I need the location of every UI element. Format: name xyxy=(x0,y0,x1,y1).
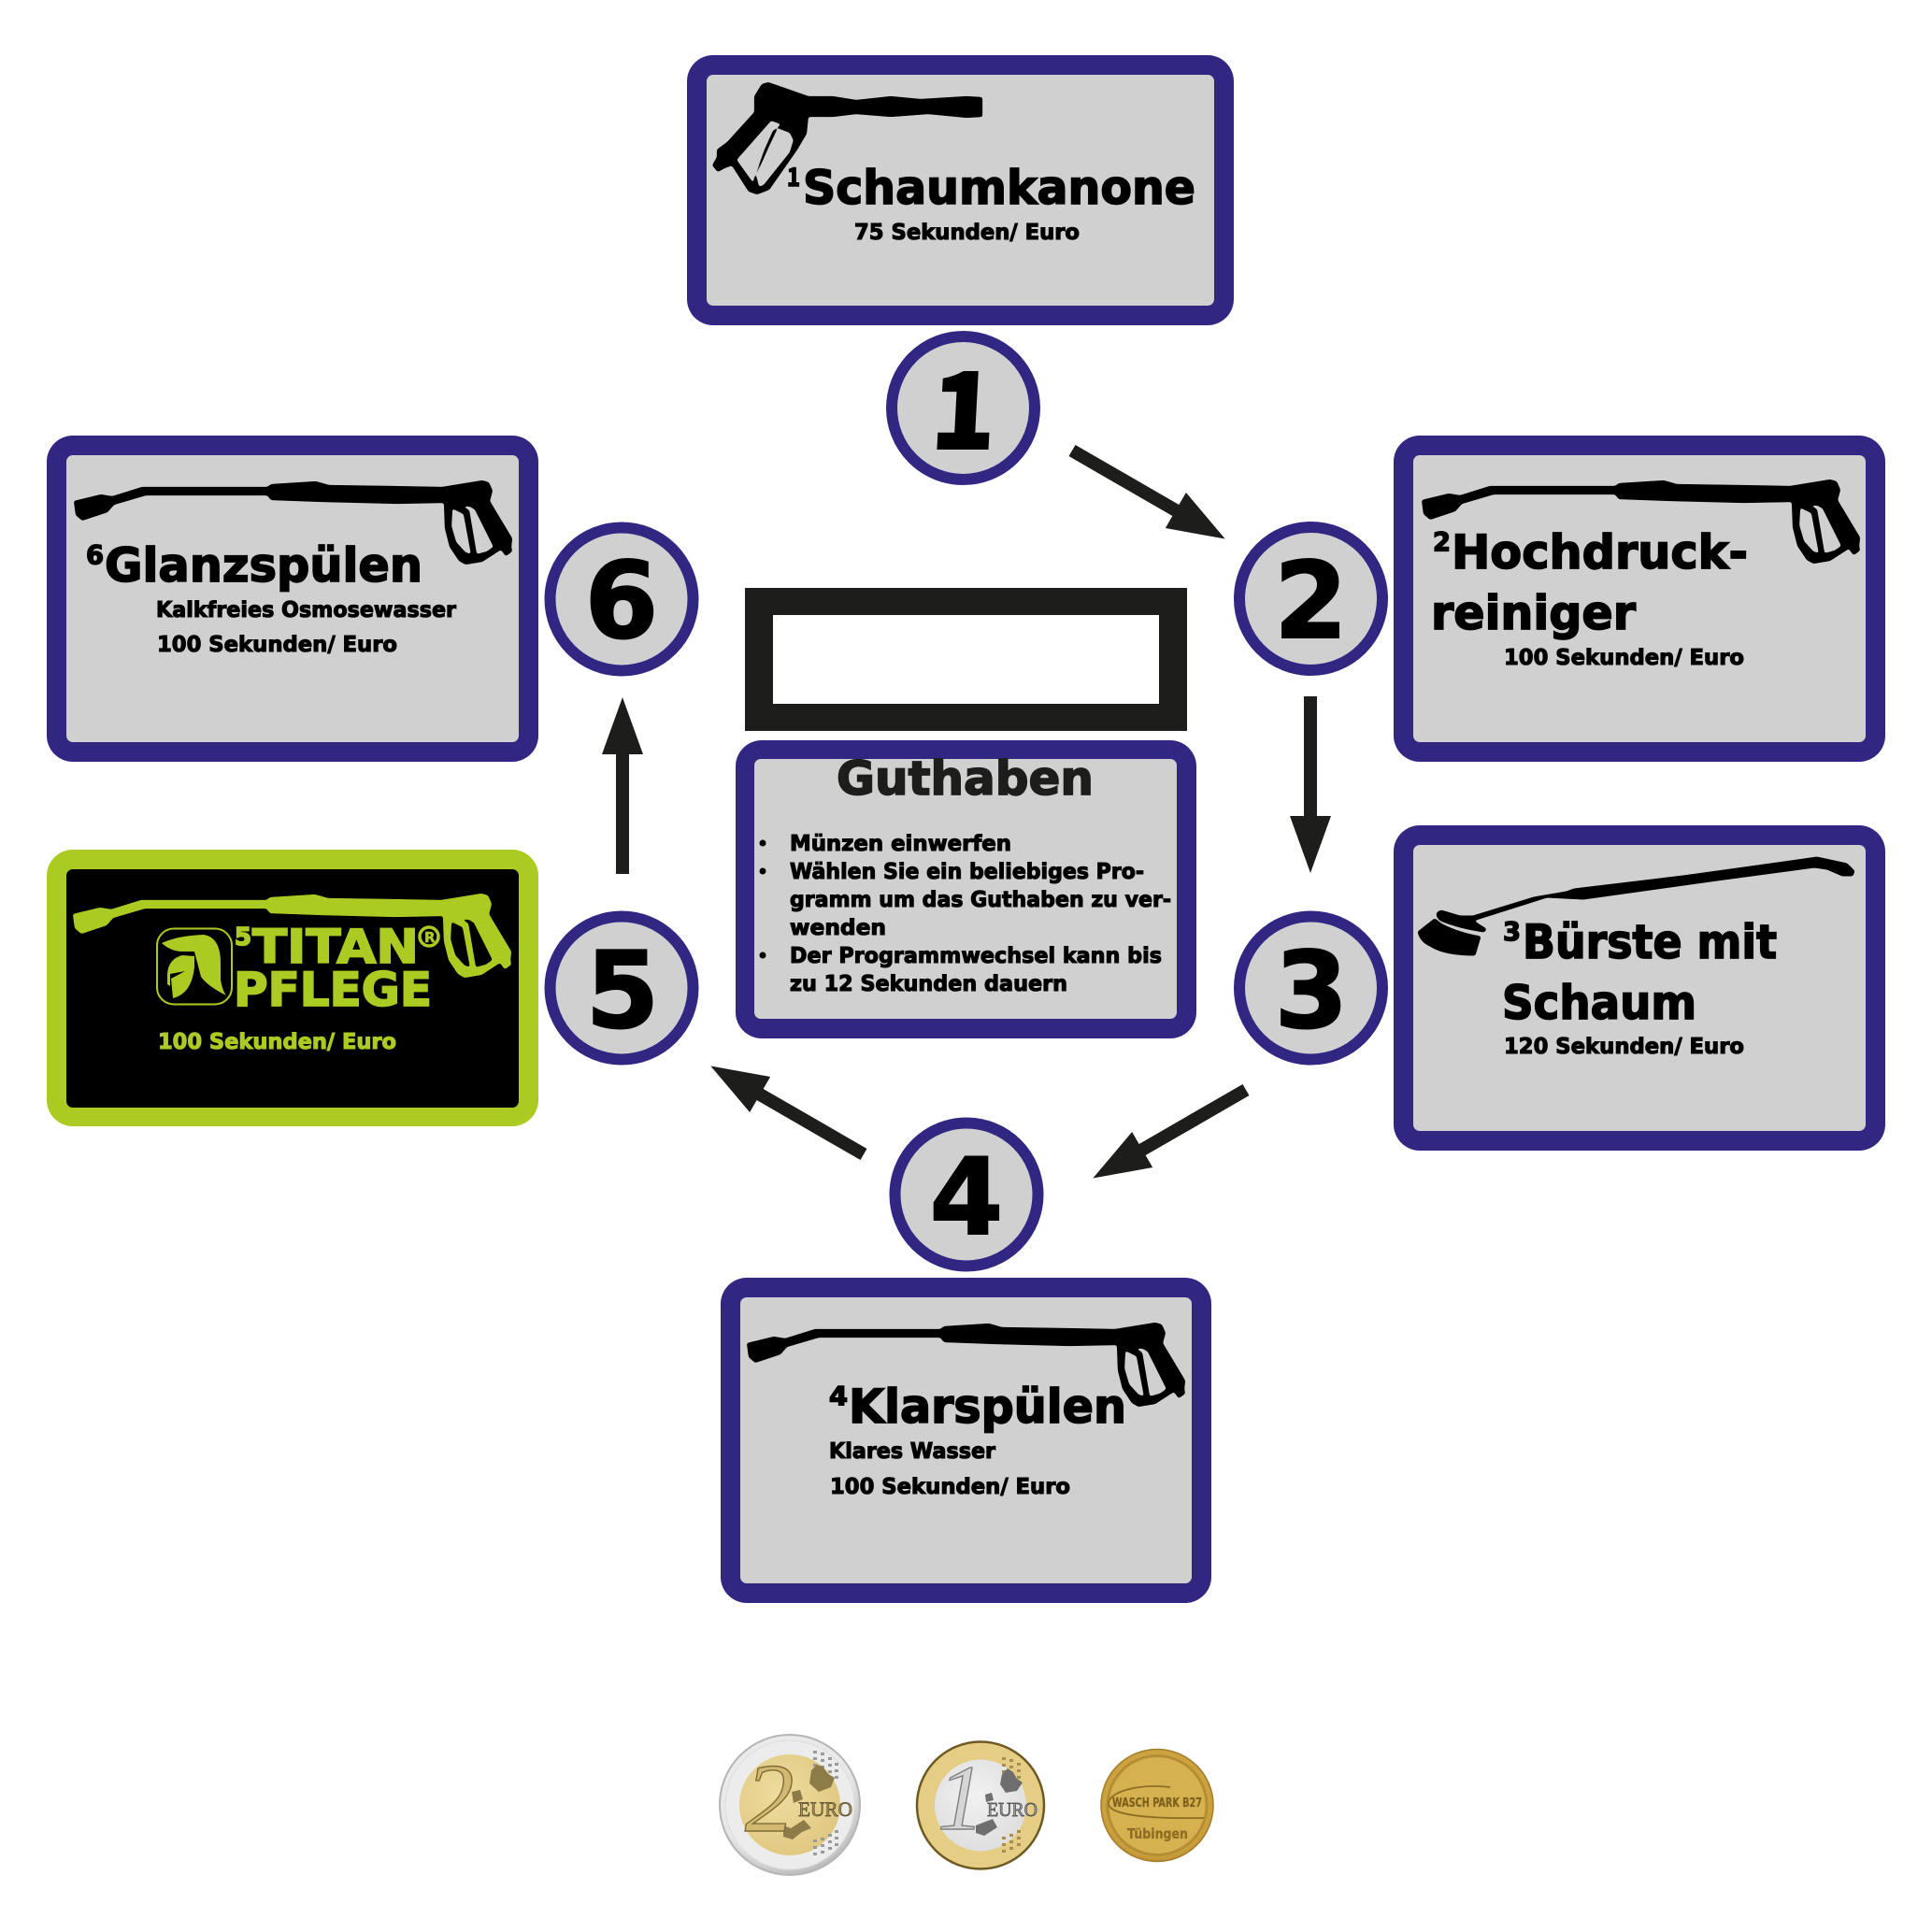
bullet list: Münzen einwerfen xyxy=(790,832,1011,856)
brand: TITAN: TITAN xyxy=(252,920,419,974)
text: Kalkfreies Osmosewasser: Kalkfreies Osmosewasser xyxy=(156,598,457,623)
coin: WaschPark token xyxy=(1101,1750,1213,1862)
coin: 2 Euro: 2 xyxy=(745,1743,794,1853)
arrow: 3 to 4 xyxy=(1082,1072,1256,1196)
display frame xyxy=(745,588,1187,731)
icon: foam cannon gun xyxy=(712,82,982,194)
step badge 4 xyxy=(895,1123,1038,1266)
coin: 1 Euro xyxy=(917,1742,1044,1869)
text: duration: 120 Sekunden/ Euro xyxy=(1504,1035,1744,1059)
panel: 4 Klarspülen xyxy=(721,1278,1211,1603)
coin: WaschPark token: WASCH PARK B27 xyxy=(1112,1796,1202,1810)
registered mark xyxy=(420,927,438,946)
step badge 5 xyxy=(550,916,694,1060)
step badge 3 xyxy=(1239,916,1382,1060)
heading line 2: reiniger xyxy=(1431,586,1636,640)
bullet list xyxy=(759,832,1171,996)
arrow: 1 to 2 xyxy=(1062,433,1236,557)
coin: 2 Euro: EURO xyxy=(798,1797,852,1821)
heading: Glanzspülen: Glanzspülen xyxy=(105,538,422,593)
text: duration: 100 Sekunden/ Euro xyxy=(830,1475,1070,1499)
step badge 3: 3 xyxy=(1275,929,1348,1052)
icon: spray lance xyxy=(74,480,512,565)
arrow: 5 to 6 xyxy=(602,697,643,874)
coin: 1 Euro: EURO xyxy=(987,1798,1038,1821)
step superscript 1: 1 xyxy=(787,157,800,193)
heading: Schaum: Schaum xyxy=(1502,976,1696,1030)
text: duration: 100 Sekunden/ Euro xyxy=(158,1030,396,1054)
heading: Guthaben: Guthaben xyxy=(837,751,1094,806)
step superscript 3: 3 xyxy=(1503,916,1521,947)
heading: Hochdruck-reiniger: Hochdruck- xyxy=(1452,525,1748,580)
brand: PFLEGE: PFLEGE xyxy=(234,963,432,1017)
step superscript 6: 6 xyxy=(86,539,104,570)
text: duration: 100 Sekunden/ Euro xyxy=(1504,646,1744,670)
logo: Titan helmet xyxy=(157,929,232,1004)
step badge 2: 2 xyxy=(1274,539,1348,663)
step badge 1: 1 xyxy=(928,326,1000,479)
text: duration: 75 Sekunden/ Euro xyxy=(854,221,1080,245)
bullet list: Wählen Sie ein beliebiges Pro- xyxy=(790,860,1144,884)
coin: 2 Euro xyxy=(720,1735,860,1875)
step badge 2 xyxy=(1239,527,1382,670)
step superscript 2: 2 xyxy=(1433,526,1451,557)
step badge 4: 4 xyxy=(930,1136,1003,1259)
icon: foam brush xyxy=(1418,857,1854,955)
panel: 2 Hochdruckreiniger xyxy=(1394,436,1885,762)
step superscript 4: 4 xyxy=(829,1381,848,1411)
icon: spray lance xyxy=(1422,479,1860,564)
panel: Guthaben xyxy=(736,740,1196,1038)
heading: Bürste mit: Bürste mit xyxy=(1523,915,1777,969)
step badge 1 xyxy=(892,326,1035,479)
arrow: 4 to 5 xyxy=(700,1048,874,1172)
step superscript 5: 5 xyxy=(235,923,251,952)
bullet list: gramm um das Guthaben zu ver- xyxy=(790,888,1171,912)
icon: green spray lance xyxy=(73,894,511,978)
coin: WaschPark token: Tübingen xyxy=(1127,1825,1188,1842)
panel: 1 Schaumkanone xyxy=(687,55,1234,325)
step badge 6: 6 xyxy=(585,539,658,663)
arrow: 2 to 3 xyxy=(1290,696,1331,873)
bullet list: wenden xyxy=(790,916,886,940)
coin: 1 Euro: 1 xyxy=(937,1746,984,1850)
heading: Klarspülen: Klarspülen xyxy=(849,1380,1126,1434)
panel: 6 Glanzspülen xyxy=(47,436,538,762)
heading: Schaumkanone: Schaumkanone xyxy=(803,161,1195,215)
panel: 5 Titan Pflege xyxy=(47,850,538,1126)
text: duration: 100 Sekunden/ Euro xyxy=(157,633,397,657)
bullet list: zu 12 Sekunden dauern xyxy=(790,972,1067,996)
step badge 5: 5 xyxy=(586,929,659,1052)
text: Klares Wasser: Klares Wasser xyxy=(829,1439,996,1464)
icon: spray lance xyxy=(747,1323,1185,1407)
registered mark: R xyxy=(424,929,436,946)
bullet list: Der Programmwechsel kann bis xyxy=(790,944,1162,968)
step badge 6 xyxy=(550,527,694,671)
panel: 3 Bürste mit Schaum xyxy=(1394,825,1885,1151)
